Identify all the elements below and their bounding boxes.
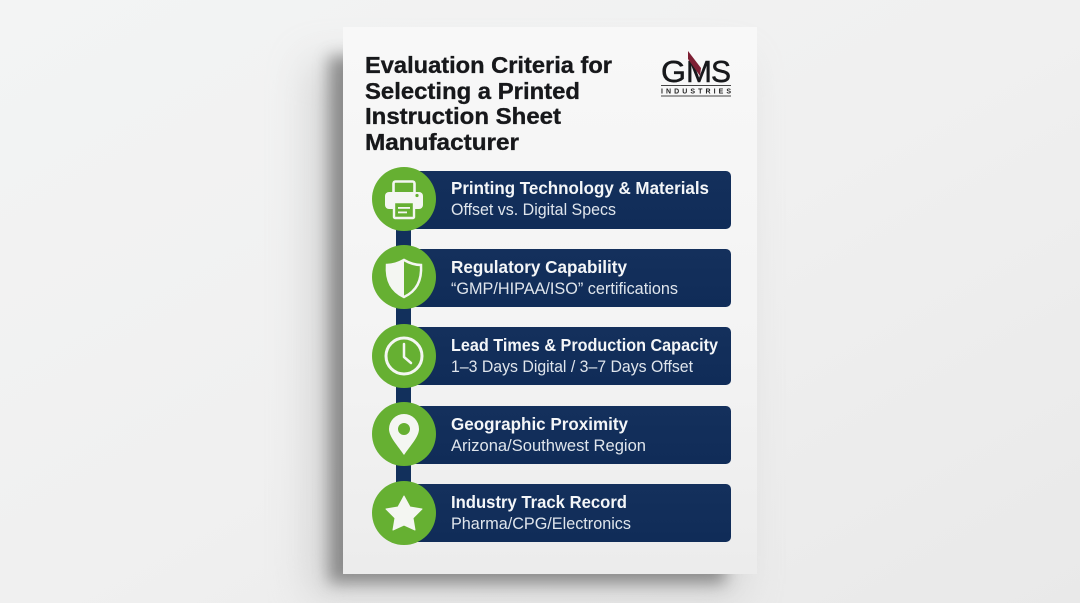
logo: GMS Industries: M [686, 54, 712, 89]
subheading 1: Offset vs. Digital Specs [451, 200, 616, 219]
icon: star [372, 481, 436, 545]
subheading 4: Arizona/Southwest Region [451, 436, 646, 455]
heading 3: Lead Times & Production Capacity [451, 335, 718, 355]
logo: GMS Industries [661, 51, 731, 96]
subheading 3: 1–3 Days Digital / 3–7 Days Offset [451, 357, 693, 376]
criterion 3: lead times [372, 324, 731, 388]
bar 1 [400, 171, 731, 229]
criterion 5: industry track record [372, 481, 731, 545]
title: Instruction Sheet [365, 103, 561, 129]
heading 2: Regulatory Capability [451, 257, 627, 277]
bar 5 [400, 484, 731, 542]
heading 4: Geographic Proximity [451, 414, 628, 434]
title: Selecting a Printed [365, 78, 580, 104]
heading 1: Printing Technology & Materials [451, 178, 709, 198]
subheading 2: “GMP/HIPAA/ISO” certifications [451, 279, 678, 298]
bar 2 [400, 249, 731, 307]
title: Manufacturer [365, 129, 519, 155]
icon: map pin [372, 402, 436, 466]
title [365, 52, 612, 155]
subheading 5: Pharma/CPG/Electronics [451, 514, 631, 533]
sheet shadow [308, 56, 742, 597]
criterion 4: geographic proximity [372, 402, 731, 466]
logo: GMS Industries: G [661, 54, 686, 89]
icon: shield [372, 245, 436, 309]
criterion 2: regulatory capability [372, 245, 731, 309]
timeline spine [396, 225, 411, 487]
criterion 1: printing technology [372, 167, 731, 231]
bar 4 [400, 406, 731, 464]
logo: GMS Industries: S [711, 54, 731, 89]
icon: printer [372, 167, 436, 231]
bar 3 [400, 327, 731, 385]
icon: clock [372, 324, 436, 388]
logo: GMS Industries: INDUSTRIES [661, 88, 731, 96]
panel: printed sheet [343, 27, 757, 574]
title: Evaluation Criteria for [365, 52, 612, 78]
heading 5: Industry Track Record [451, 492, 627, 512]
